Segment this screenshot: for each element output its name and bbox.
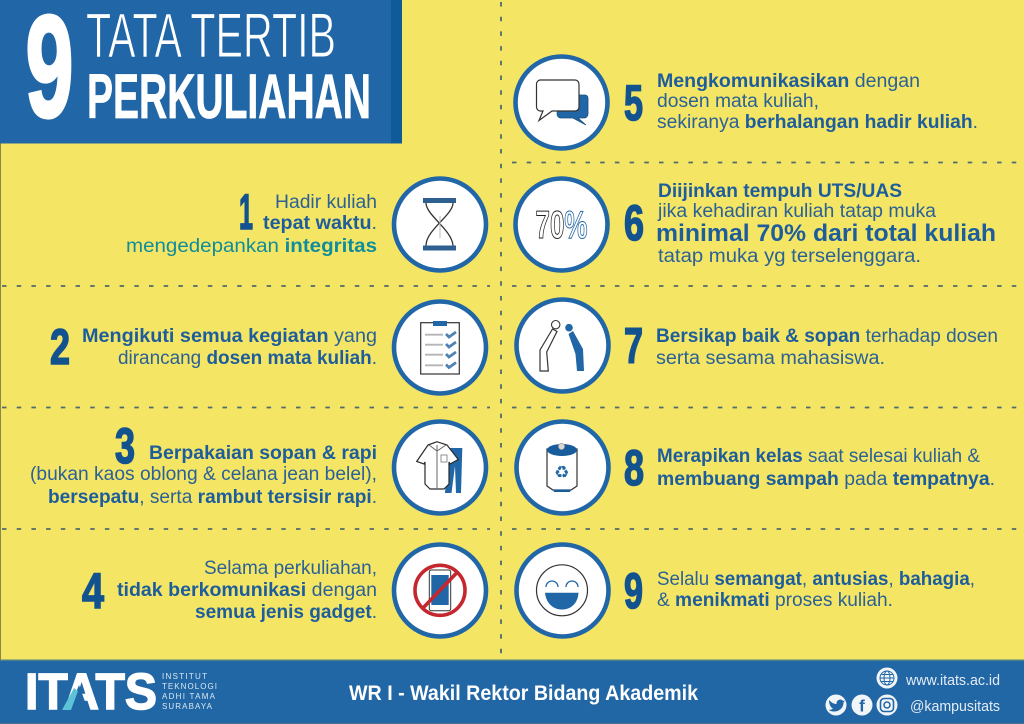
logo caption <box>162 672 217 711</box>
icon: shirt and trousers <box>394 422 486 514</box>
number 5: 5 <box>624 75 643 131</box>
rule 2 text: dirancang dosen mata kuliah. <box>118 348 377 369</box>
rule 1 text: tepat waktu. <box>263 213 377 234</box>
rule 1 <box>126 178 486 270</box>
icon: instagram <box>876 694 898 716</box>
logo caption: SURABAYA <box>162 702 213 711</box>
rule 9 text: Selalu semangat, antusias, bahagia, <box>657 569 975 590</box>
rule 3 text: bersepatu, serta rambut tersisir rapi. <box>48 487 377 508</box>
rule 4 text: semua jenis gadget. <box>195 602 377 623</box>
icon: recycling bin <box>516 422 608 514</box>
icon: 70 percent: 70% <box>536 204 588 247</box>
rule 9 text: & menikmati proses kuliah. <box>657 590 893 611</box>
number 7: 7 <box>624 318 643 374</box>
logo caption: TEKNOLOGI <box>162 682 217 691</box>
title banner <box>0 0 402 148</box>
rule 3 <box>30 418 486 514</box>
icon: clipboard checklist <box>394 302 486 394</box>
rule 8 text: Merapikan kelas saat selesai kuliah & <box>657 446 980 467</box>
icon: bowing figures <box>516 300 608 392</box>
rule 8 text <box>657 446 995 490</box>
icon: 70 percent <box>516 178 608 270</box>
rule 8 text: membuang sampah pada tempatnya. <box>657 469 995 490</box>
icon: facebook <box>852 694 872 716</box>
rule 1 text: mengedepankan integritas <box>126 236 377 257</box>
number 6: 6 <box>624 195 644 251</box>
icon: twitter <box>826 694 846 716</box>
rule 3 text: (bukan kaos oblong & celana jean belel), <box>30 464 377 485</box>
number 2: 2 <box>50 319 70 375</box>
rule 6 text: jika kehadiran kuliah tatap muka <box>657 201 936 222</box>
rule 7 text: serta sesama mahasiswa. <box>656 348 885 369</box>
number 3: 3 <box>115 418 135 474</box>
icon: globe <box>876 668 898 688</box>
rule 4 <box>82 544 486 636</box>
rule 6 <box>516 178 996 270</box>
rule 9 text <box>657 569 975 611</box>
rule 5 <box>516 56 978 148</box>
icon: facebook: f <box>859 696 865 716</box>
rule 3 text <box>30 443 377 508</box>
logo caption: ADHI TAMA <box>162 692 216 701</box>
number 8: 8 <box>624 440 644 496</box>
rule 6 text: minimal 70% dari total kuliah <box>656 220 996 247</box>
rule 4 text: Selama perkuliahan, <box>204 558 377 579</box>
rule 4 text <box>117 558 377 623</box>
icon: hourglass <box>394 178 486 270</box>
rule 6 text: tatap muka yg terselenggara. <box>658 246 921 267</box>
number 9: 9 <box>624 563 643 619</box>
rule 5 text: Mengkomunikasikan dengan <box>657 71 920 92</box>
rule 1 text <box>126 192 377 257</box>
icon: recycling bin: ♻ <box>554 463 569 483</box>
number 1: 1 <box>239 184 253 240</box>
number 4: 4 <box>82 563 104 619</box>
rule 2 <box>50 302 486 394</box>
rule 7 text: Bersikap baik & sopan terhadap dosen <box>656 326 998 347</box>
title line: PERKULIAHAN: PERKULIAHAN <box>87 62 371 132</box>
rule 5 text <box>657 71 978 133</box>
rule 5 text: sekiranya berhalangan hadir kuliah. <box>657 112 978 133</box>
rule 3 text: Berpakaian sopan & rapi <box>149 443 377 464</box>
rule 6 text <box>656 181 996 267</box>
social handle: @kampusitats <box>910 698 1000 715</box>
rule 2 text: Mengikuti semua kegiatan yang <box>82 326 377 347</box>
rule 7 text <box>656 326 998 369</box>
title line: TATA TERTIB: TATA TERTIB <box>86 1 336 71</box>
rule 6 text: Diijinkan tempuh UTS/UAS <box>658 181 902 202</box>
rule 4 text: tidak berkomunikasi dengan <box>117 580 377 601</box>
website: www.itats.ac.id <box>905 672 1000 689</box>
logo: ITATS: ITATS <box>25 663 157 720</box>
rule 2 text <box>82 326 377 369</box>
rule 1 text: Hadir kuliah <box>275 192 377 213</box>
logo caption: INSTITUT <box>162 672 207 681</box>
rule 5 text: dosen mata kuliah, <box>657 91 819 112</box>
icon: laughing face <box>516 544 608 636</box>
rule 8 <box>516 422 995 514</box>
footer centre heading: WR I - Wakil Rektor Bidang Akademik <box>349 682 698 705</box>
footer bar <box>0 660 1024 724</box>
icon: speech bubbles <box>516 56 608 148</box>
rule 7 <box>516 300 998 392</box>
icon: no phone <box>394 544 486 636</box>
rule 9 <box>516 544 975 636</box>
